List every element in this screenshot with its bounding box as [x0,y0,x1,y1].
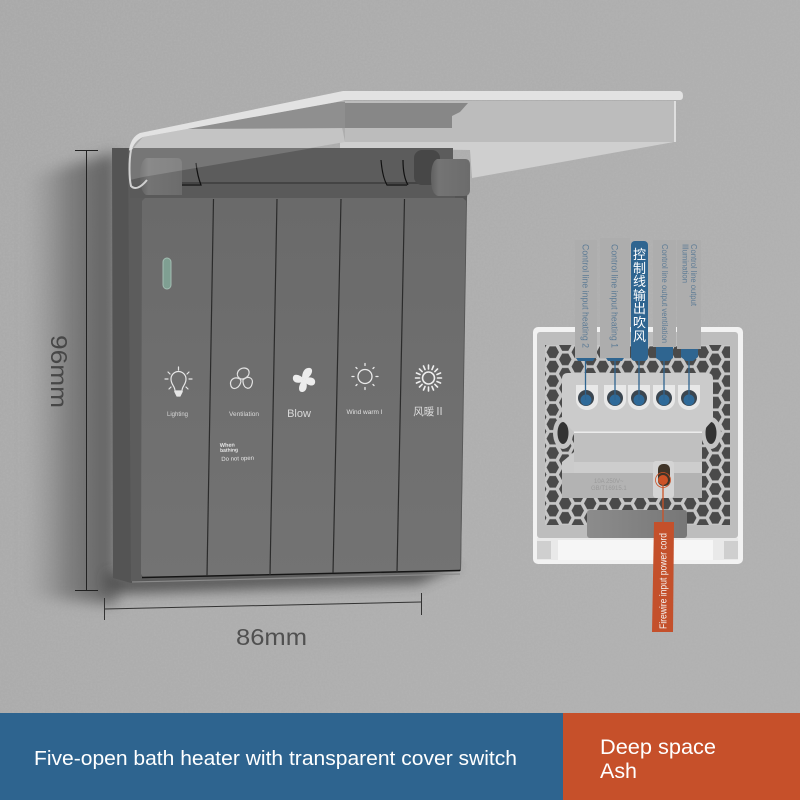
live wire terminal [653,461,674,498]
right hinge [431,159,470,196]
tag: control wire output blow: 出 [633,301,646,316]
hinge channel below cover [130,184,455,198]
warning note [220,442,254,463]
tag: firewire input power cord [652,522,674,632]
hinge rail [182,182,432,184]
tag: control wire output blow: 制 [633,261,646,276]
rear wiring view [533,238,743,632]
switch plate with five rockers [132,198,466,582]
banner: colour name: Deep space [600,736,716,759]
module rating text [591,479,627,492]
dimension: height: 96mm [46,335,72,408]
tag: control line input heating 1: Control line input heating 1 [610,244,620,348]
tag: control wire output blow: 控 [633,247,646,262]
label: Wind warm I: Wind warm I [346,409,383,416]
tag: control line input heating 2 [575,240,597,361]
warning note: When [220,442,236,449]
left mounting hole [553,417,573,449]
cover face left slope lower band [130,102,345,152]
banner: colour name [563,713,800,800]
cover face left slope darker band [186,102,350,129]
banner: product name [0,713,563,800]
wall shadow of switch [25,152,460,604]
banner: colour name: Ash [600,760,637,783]
tag: control wire output blow: 输 [633,288,646,303]
central module [562,373,713,498]
label: wind warm II: 风暖Ⅱ [413,405,445,418]
terminal screws [576,385,700,410]
hinge wires [182,160,408,185]
icon: sun warm I [352,364,378,390]
honeycomb openings [545,345,730,525]
tag: control wire output blow: 吹 [633,315,646,330]
tag: control wire output blow: 线 [633,274,646,289]
cover underside on wall [340,142,674,178]
tag: control line output ventilation: Control line output ventilation [660,244,670,343]
switch back frame [112,148,470,583]
white outer frame [533,327,743,564]
dark lump behind right hinge [414,150,440,185]
label: Blow: Blow [287,408,311,420]
dimension: width [104,593,422,650]
live wire lead line [662,480,664,523]
ghost reflection in cover [345,103,468,128]
icon: sun warm II [416,365,442,391]
dimension: width: 86mm [236,624,307,650]
left hinge [140,158,182,195]
warning note: Do not open [221,456,254,463]
tag: control line output illumination [677,240,701,361]
icon: light bulb [165,367,192,396]
right mounting hole [701,417,721,449]
cover front face [345,101,676,142]
label: Lighting: Lighting [167,412,188,418]
tag: firewire input power cord: Firewire input power cord [658,533,670,629]
tag: control line input heating 2: Control line input heating 2 [580,244,590,348]
tag: control line output ventilation [653,240,676,361]
warning note: bathing [220,447,238,454]
tag: control line output illumination: Control line output [689,244,699,307]
icon: blow fan solid [293,368,315,392]
tag: control wire output blow: 风 [633,329,646,344]
bottom white strip [537,538,738,560]
transparent cover [129,91,683,188]
cover top edge [129,91,683,152]
tag: control line output illumination: Illumination [680,244,690,283]
gray plate [537,332,738,538]
tag: control wire output blow [631,241,648,361]
banner: product name: Five-open bath heater with transparent cover switch [34,748,517,770]
cover front right edge [674,101,676,142]
cover left curve [130,150,147,188]
module rating text: 10A 250V~ [594,479,624,485]
lower recess [587,510,687,538]
icon: ventilation fan outline [231,368,252,388]
switch with open transparent cover [25,91,683,604]
control lead lines [586,360,689,400]
label: Ventilation: Ventilation [229,411,259,418]
tag: control line input heating 1 [600,238,630,361]
indicator light [163,258,171,289]
module rating text: GB/T16915.1 [591,486,627,492]
lit area seen through cover over switch [130,148,313,180]
inner frame strip [128,148,466,581]
